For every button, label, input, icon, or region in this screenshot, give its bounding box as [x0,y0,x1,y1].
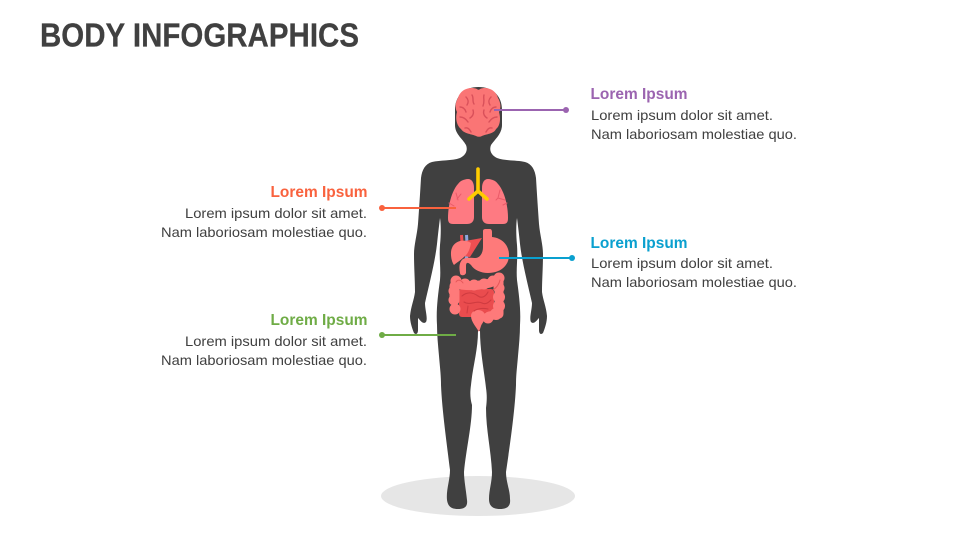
text block: green [161,333,367,368]
organ: lungs [448,179,508,224]
heading: orange: Lorem Ipsum [270,184,368,201]
callout: purple brain [494,86,797,142]
text block: orange [161,205,367,240]
connector: purple [494,107,569,113]
organ: stomach [459,229,509,275]
text block: purple: Nam laboriosam molestiae quo. [591,126,797,142]
text block: blue: Nam laboriosam molestiae quo. [591,274,797,290]
heading: purple: Lorem Ipsum [590,86,688,103]
title: BODY INFOGRAPHICS [40,16,359,54]
connector: blue [499,255,575,261]
organ: intestines [448,272,505,332]
text block: purple [591,107,797,142]
text block: blue [591,255,797,290]
connector: orange [379,205,456,211]
callout: orange lungs [161,184,456,240]
heading: blue: Lorem Ipsum [590,235,688,252]
organ: brain [456,88,500,137]
inner small intestine [459,289,494,317]
floor shadow [381,476,575,516]
text block: blue: Lorem ipsum dolor sit amet. [591,255,773,271]
text block: green: Lorem ipsum dolor sit amet. [185,333,367,349]
heading: green: Lorem Ipsum [270,312,368,329]
text block: orange: Lorem ipsum dolor sit amet. [185,205,367,221]
text block: orange: Nam laboriosam molestiae quo. [161,224,367,240]
text block: green: Nam laboriosam molestiae quo. [161,352,367,368]
text block: purple: Lorem ipsum dolor sit amet. [591,107,773,123]
organ: liver [451,235,482,265]
connector: green [379,332,456,338]
organ: trachea [469,169,487,199]
callout: blue stomach [499,235,797,290]
human body silhouette [410,87,547,509]
callout: green intestines [161,312,456,368]
